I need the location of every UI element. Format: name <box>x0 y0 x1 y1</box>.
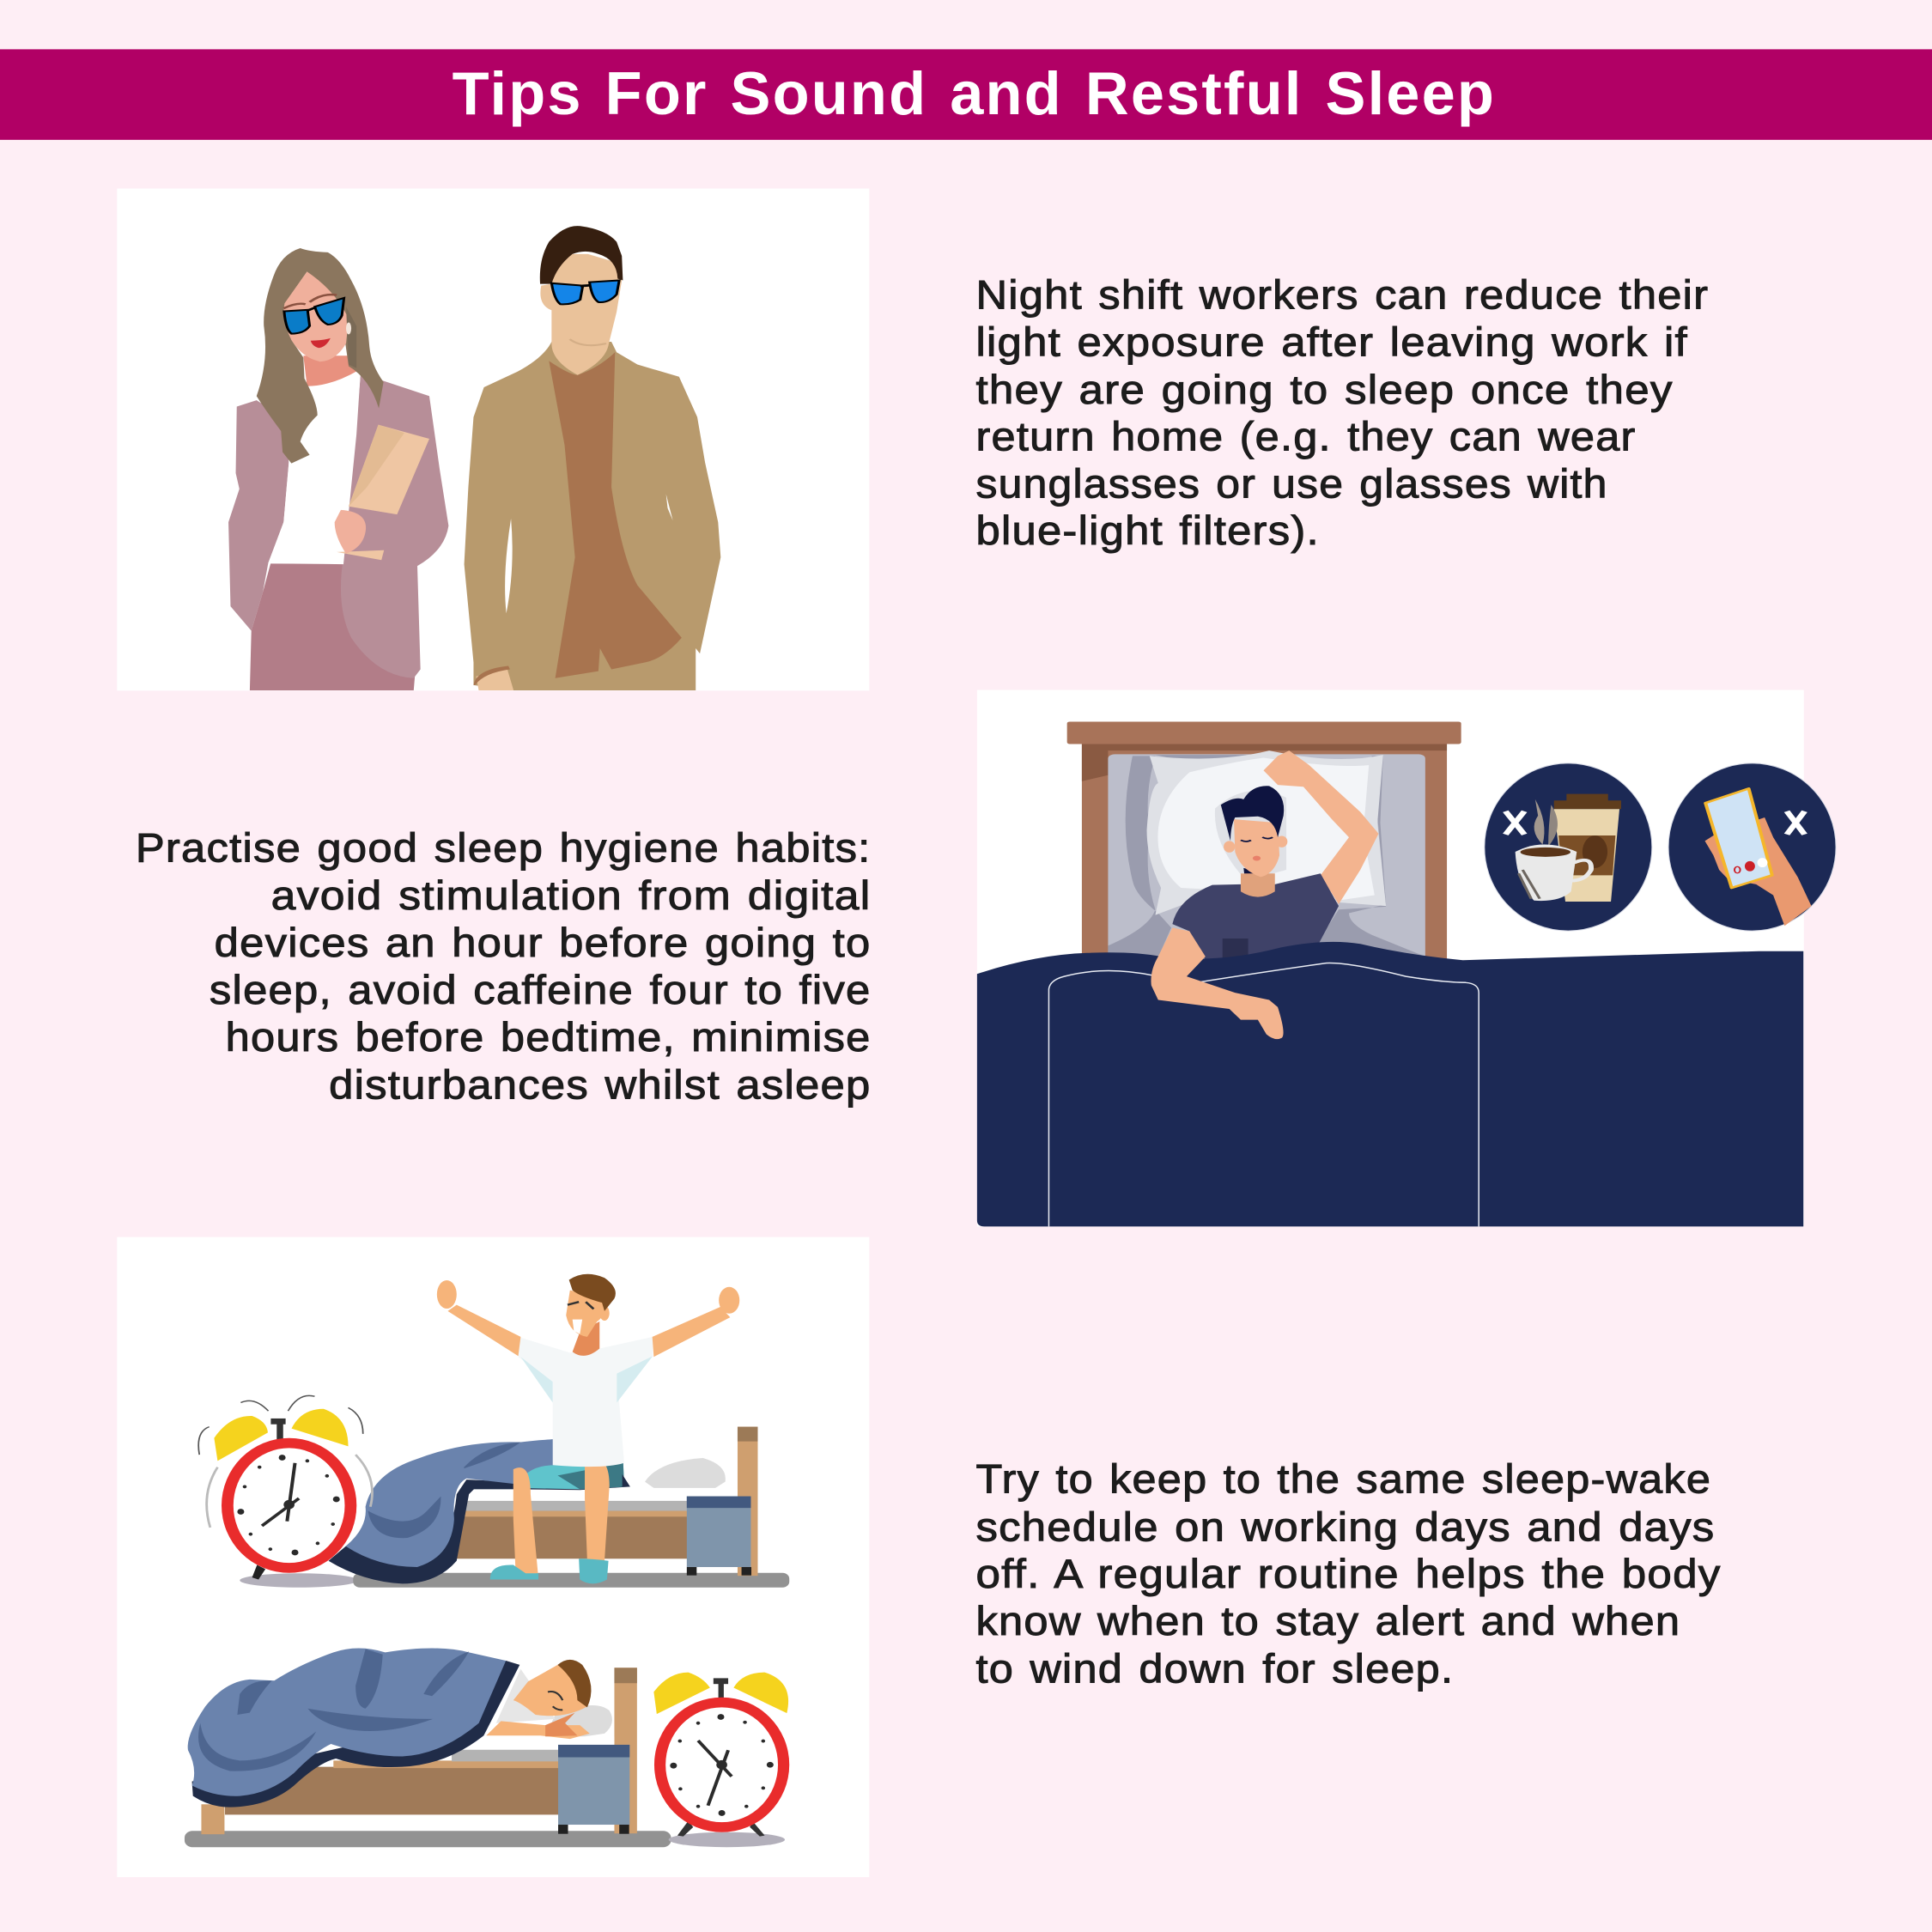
text block: sleep-wake schedule: know when to stay alert and when <box>975 1599 1680 1644</box>
waking scene floor <box>240 1573 789 1588</box>
text block: night shift workers: they are going to sleep once they <box>975 368 1674 413</box>
text block: sleep hygiene habits: devices an hour before going to <box>215 920 872 966</box>
blanket over sleeper <box>188 1648 519 1807</box>
text block: sleep hygiene habits: sleep, avoid caffeine four to five <box>210 968 872 1013</box>
text block: night shift workers: return home (e.g. they can wear <box>975 414 1637 459</box>
icon: coffee crossed out <box>1485 763 1652 931</box>
panel: couple wearing sunglasses <box>117 189 869 690</box>
text block: sleep-wake schedule: to wind down for sleep. <box>975 1646 1454 1692</box>
text block: sleep hygiene habits: avoid stimulation from digital <box>271 873 872 919</box>
text block: sleep hygiene habits: disturbances whilst asleep <box>329 1062 872 1108</box>
sleeping scene floor <box>185 1831 785 1847</box>
text block: sleep-wake schedule: off. A regular routine helps the body <box>975 1552 1722 1597</box>
text block: night shift workers: light exposure after leaving work if <box>975 320 1688 366</box>
blanket <box>329 1439 630 1583</box>
text block: night shift workers <box>975 272 1709 554</box>
ringing alarm clock <box>198 1395 372 1580</box>
text block: sleep hygiene habits: hours before bedtime, minimise <box>226 1015 872 1060</box>
text block: night shift workers: Night shift workers can reduce their <box>975 272 1709 318</box>
text block: sleep hygiene habits: Practise good sleep hygiene habits: <box>136 826 872 872</box>
text block: sleep-wake schedule <box>975 1456 1722 1692</box>
bed headboard <box>1067 721 1461 962</box>
arm over blanket <box>1151 927 1284 1039</box>
sleeping man <box>1172 750 1378 960</box>
sleeping-scene alarm clock <box>653 1673 789 1837</box>
man figure <box>465 226 720 690</box>
title banner <box>0 49 1932 140</box>
text block: sleep hygiene habits <box>136 826 872 1108</box>
panel: man sleeping in bed, no caffeine or phone <box>977 690 1836 1226</box>
stretching man <box>437 1274 739 1583</box>
bed with sleeping man <box>201 1660 637 1834</box>
icon: phone crossed out <box>1668 763 1836 931</box>
blanket <box>977 942 1803 1226</box>
title: Tips For Sound and Restful Sleep <box>453 59 1496 127</box>
panel: waking and sleeping with alarm clocks <box>117 1237 869 1877</box>
text block: sleep-wake schedule: Try to keep to the same sleep-wake <box>975 1456 1711 1502</box>
text block: night shift workers: sunglasses or use glasses with <box>975 462 1608 507</box>
woman figure <box>228 248 448 690</box>
text block: sleep-wake schedule: schedule on working days and days <box>975 1504 1715 1550</box>
pillow <box>1147 750 1386 915</box>
text block: night shift workers: blue-light filters). <box>975 508 1320 554</box>
bed frame <box>457 1427 757 1576</box>
